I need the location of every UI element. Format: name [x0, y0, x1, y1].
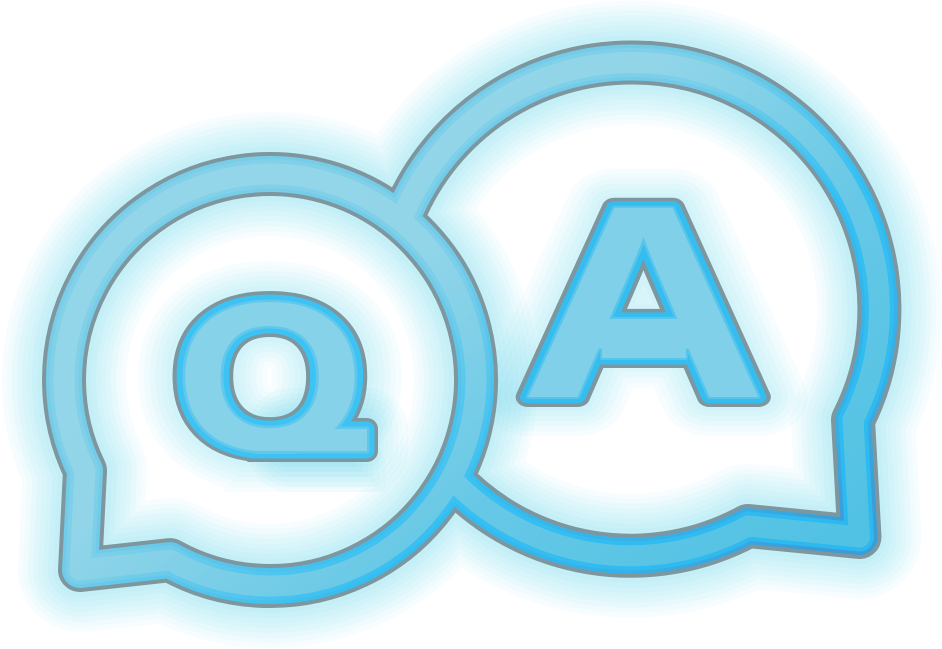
glow: halo around the letter Q: Q: [175, 259, 365, 495]
glow: halo around the letter Q: Q: [175, 259, 365, 495]
letter A: A: [520, 148, 767, 455]
glow: halo around the letter Q: Q: [175, 259, 365, 495]
glow: halo around the letter A: A: [520, 148, 767, 455]
glow: halo around the letter A: A: [520, 148, 767, 455]
letter A: A: [520, 148, 767, 455]
letter Q: Q: [175, 259, 365, 495]
glow: halo around the letter A: A: [520, 148, 767, 455]
letter A: A: [520, 148, 767, 455]
letter Q: Q: [175, 259, 365, 495]
letter Q: Q: [175, 259, 365, 495]
glow: halo around the letter Q: Q: [175, 259, 365, 495]
speech bubbles: left Q bubble and right A bubble: [64, 62, 879, 586]
letter Q: [172, 291, 378, 462]
glow: halo around the letter A: A: [520, 148, 767, 455]
letter A: A: [520, 148, 767, 455]
glow: halo around the letter A: A: [520, 148, 767, 455]
glow: soft blue halo around the bubbles: [64, 62, 879, 586]
glow: halo around the letter A: A: [520, 148, 767, 455]
letter Q: Q: [175, 259, 365, 495]
glow: halo around the letter Q: Q: [175, 259, 365, 495]
glow: halo around the letter Q: Q: [175, 259, 365, 495]
